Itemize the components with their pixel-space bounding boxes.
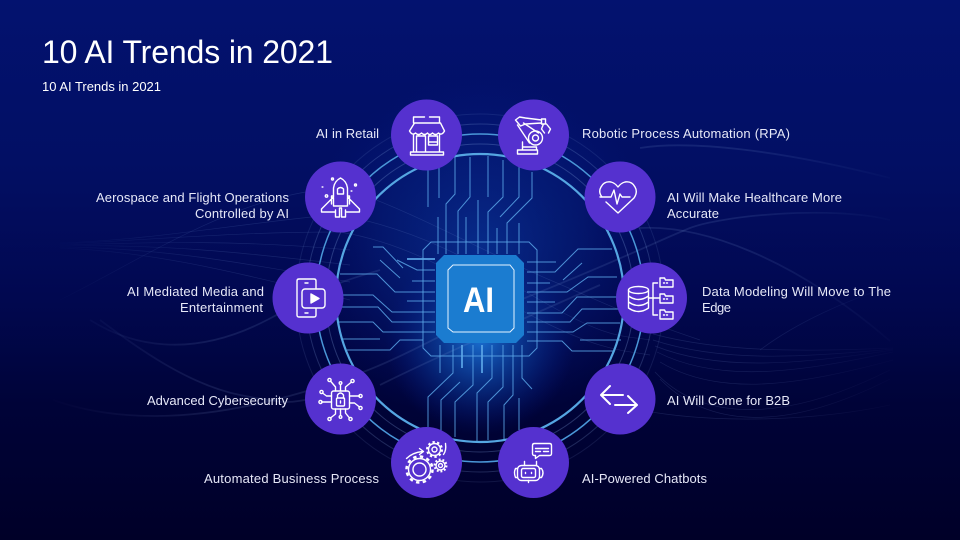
- circuit traces: [338, 155, 621, 441]
- node: Media: [272, 262, 344, 334]
- label: Data Modeling: [702, 284, 891, 315]
- label: Media: [127, 284, 264, 315]
- label: AI in Retail: AI in Retail: [316, 126, 379, 141]
- label: Cybersecurity: Advanced Cybersecurity: [147, 393, 288, 408]
- label: Automated Business Process: Automated Business Process: [204, 471, 380, 486]
- bottom traces: [428, 345, 532, 441]
- label: Healthcare: AI Will Make Healthcare More: [667, 190, 842, 205]
- label: Chatbots: AI-Powered Chatbots: [582, 471, 708, 486]
- chip outer trace frame: [423, 242, 537, 356]
- icon: gears: [406, 442, 446, 482]
- node: Cybersecurity: [305, 364, 376, 434]
- icon: robot arm: [516, 117, 550, 154]
- node: Chatbots: [498, 427, 569, 498]
- node: Data Modeling: [616, 262, 687, 334]
- icon: chatbot with speech bubble: [514, 444, 552, 482]
- label: Robotic Process Automation: Robotic Process Automation (RPA): [582, 126, 790, 141]
- left traces: [338, 247, 435, 350]
- icon: heart with pulse: [600, 182, 636, 213]
- node: Healthcare: [584, 162, 656, 232]
- node: Aerospace: [305, 162, 376, 232]
- icon: circuit lock: [319, 378, 362, 421]
- label: Aerospace: [96, 190, 290, 221]
- icon: phone with play button: [297, 279, 325, 317]
- label: Media: Entertainment: [180, 300, 263, 315]
- chip inner outline: [448, 265, 514, 332]
- node: B2B: [584, 364, 656, 434]
- label: Data Modeling: Data Modeling Will Move to The: [702, 284, 891, 299]
- subtitle: 10 AI Trends in 2021: [42, 79, 161, 94]
- label: B2B: AI Will Come for B2B: [667, 393, 790, 408]
- node: Robotic Process Automation: [498, 100, 569, 170]
- node: Automated Business Process: [391, 427, 462, 498]
- icon: storefront: [410, 117, 444, 155]
- background waves: [53, 145, 893, 419]
- label: Aerospace: Aerospace and Flight Operations: [96, 190, 290, 205]
- label: Media: AI Mediated Media and: [127, 284, 264, 299]
- AI chip: [436, 255, 524, 343]
- label: Data Modeling: Edge: [702, 300, 731, 315]
- label: Aerospace: Controlled by AI: [195, 206, 289, 221]
- icon: space shuttle: [322, 178, 360, 217]
- node: AI in Retail: [391, 100, 462, 170]
- concentric rings: [296, 114, 664, 482]
- icon: exchange arrows: [601, 386, 637, 413]
- label: Healthcare: [667, 190, 842, 221]
- right traces: [527, 249, 621, 351]
- chip body: [436, 255, 524, 343]
- top traces: [428, 155, 532, 254]
- title: 10 AI Trends in 2021: [42, 34, 333, 70]
- label: Healthcare: Accurate: [667, 206, 719, 221]
- icon: database with folders: [628, 278, 673, 319]
- chip label: AI: [463, 281, 494, 320]
